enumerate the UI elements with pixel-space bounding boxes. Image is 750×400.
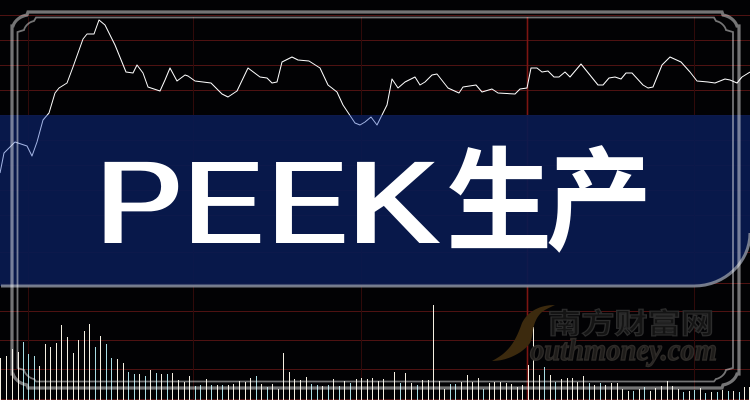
title: PEEK生产 bbox=[96, 112, 652, 274]
title latin part: E bbox=[185, 137, 263, 269]
title chinese part bbox=[446, 112, 652, 274]
title latin part: P bbox=[96, 137, 182, 269]
line chart: price curve bbox=[0, 20, 750, 173]
title latin part bbox=[96, 137, 439, 269]
title latin part: E bbox=[269, 137, 347, 269]
watermark latin name: outhmoney.com bbox=[530, 332, 717, 367]
title chinese part: 生 bbox=[446, 112, 552, 274]
volume bars: pale bbox=[0, 305, 750, 400]
panel: blue title band bbox=[0, 115, 750, 286]
watermark swoosh bbox=[492, 305, 555, 361]
watermark chinese name: 南方财富网 bbox=[548, 302, 714, 342]
title chinese part: 产 bbox=[546, 112, 652, 274]
volume bars: blue bbox=[24, 342, 740, 400]
title latin part: K bbox=[348, 137, 439, 269]
watermark: southmoney logo bbox=[492, 302, 717, 367]
band outline bbox=[1, 233, 750, 286]
